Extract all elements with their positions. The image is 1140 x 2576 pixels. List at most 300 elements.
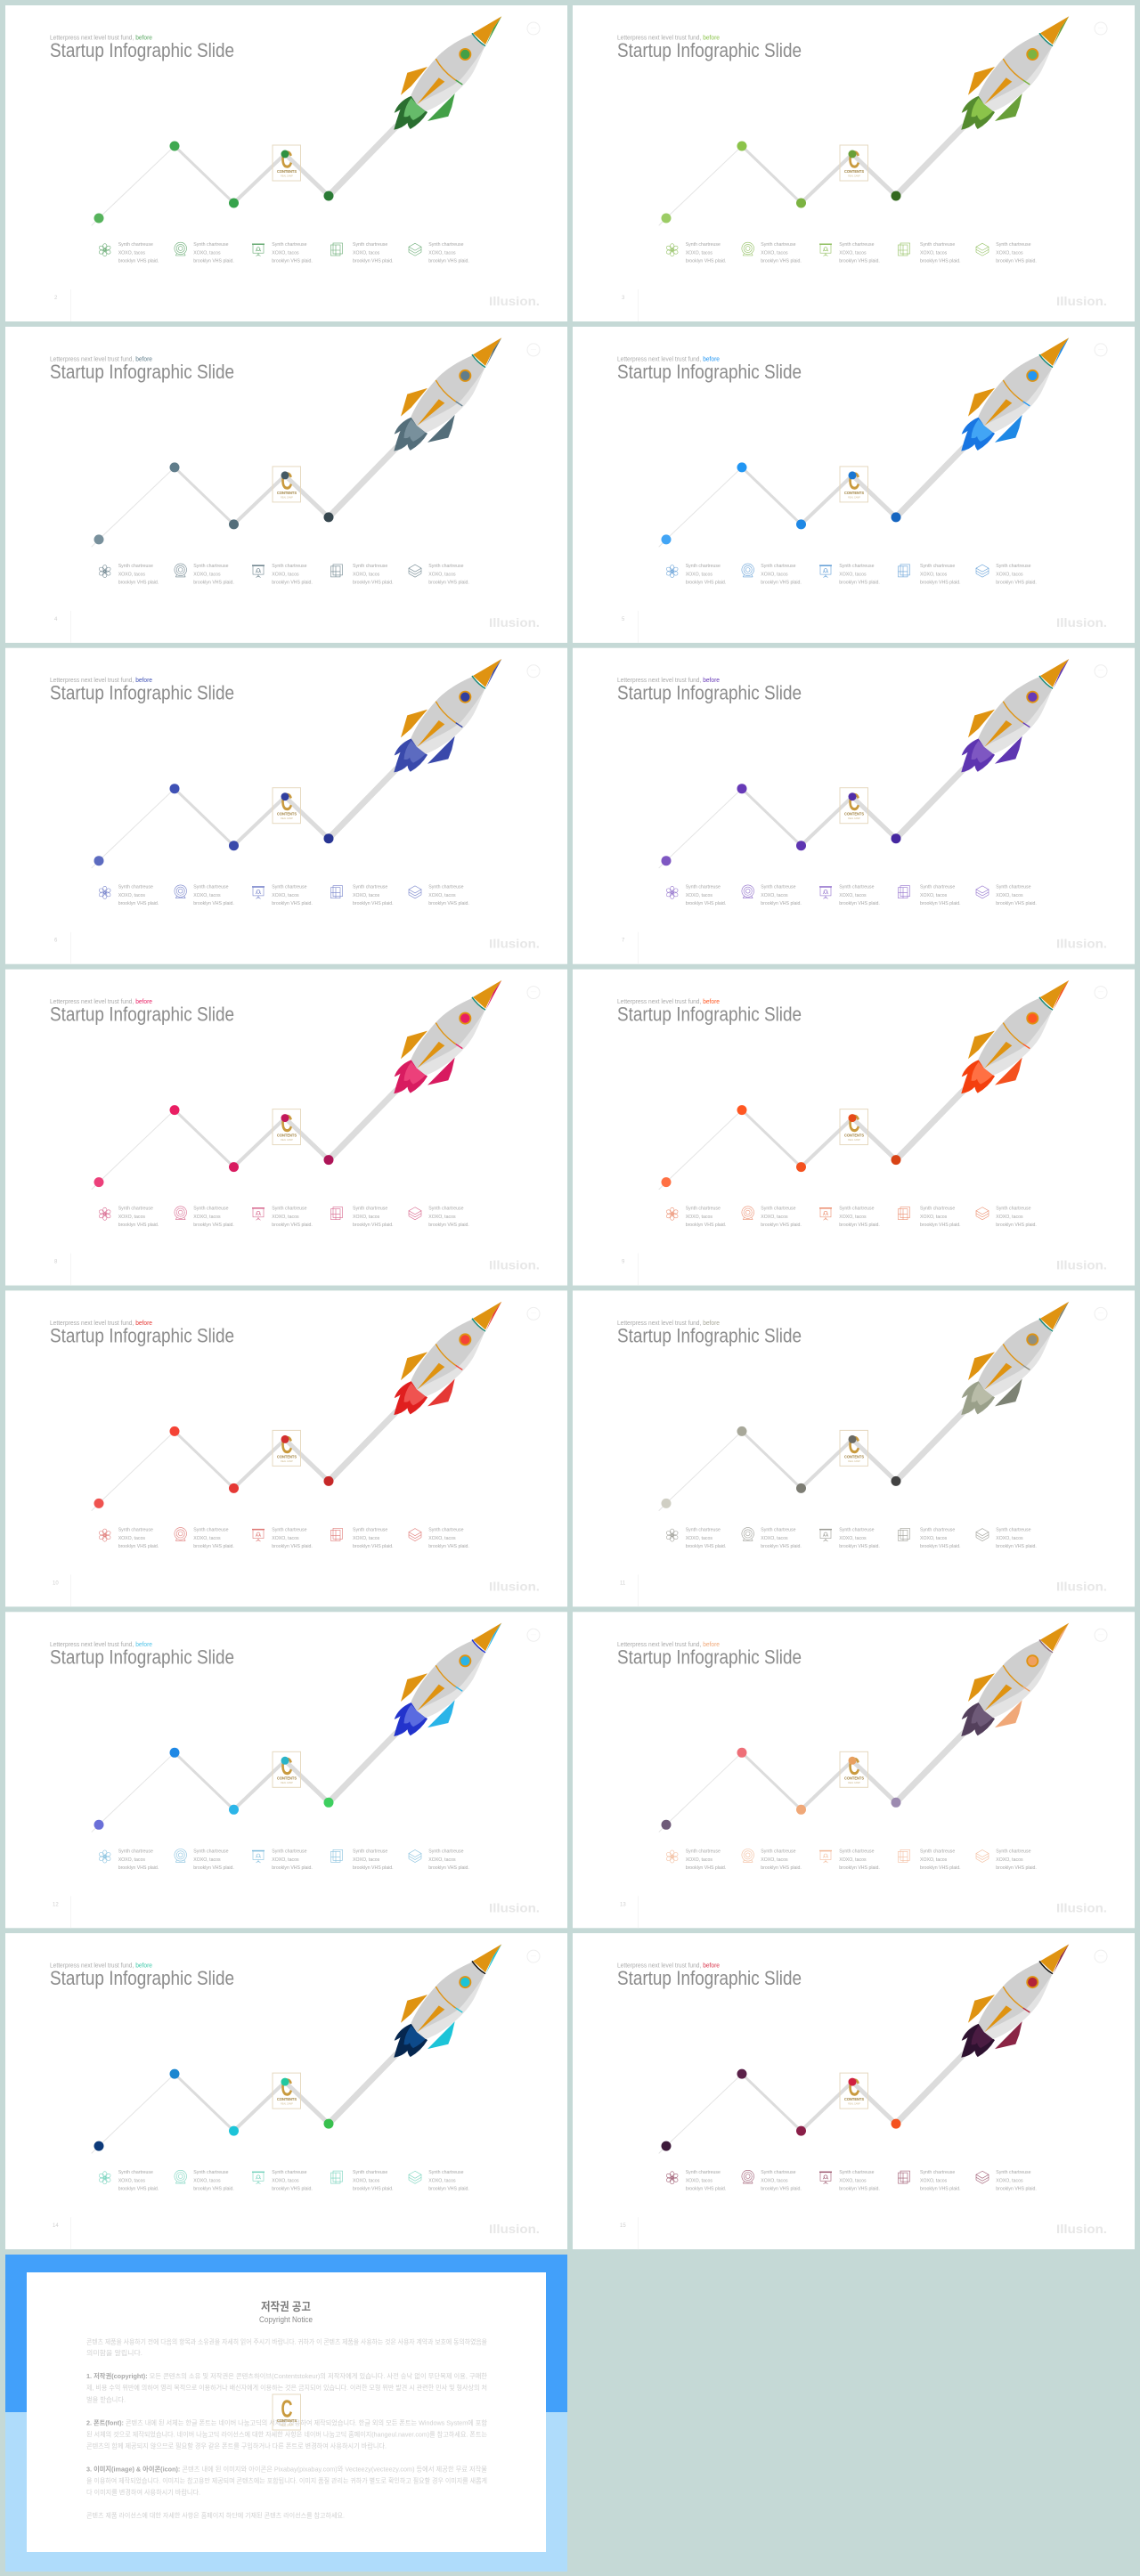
menu icon: ···: [1098, 1632, 1103, 1637]
feature list: XOXO, tacos: [193, 2179, 221, 2184]
footer: 7: [622, 939, 625, 944]
feature list: brooklyn VHS plaid.: [996, 1865, 1037, 1871]
feature list: brooklyn VHS plaid.: [118, 2187, 159, 2192]
feature list: XOXO, tacos: [839, 1536, 867, 1541]
footer: 3: [622, 296, 625, 301]
feature list: Synth chartreuse: [353, 242, 387, 248]
feature list: brooklyn VHS plaid.: [272, 580, 313, 585]
feature list: brooklyn VHS plaid.: [996, 901, 1037, 906]
feature list: Synth chartreuse: [353, 885, 387, 890]
feature list: Synth chartreuse: [839, 1849, 875, 1854]
feature list: XOXO, tacos: [839, 1857, 867, 1863]
feature list: Synth chartreuse: [686, 1207, 721, 1212]
footer: 5: [622, 617, 625, 622]
feature list: Synth chartreuse: [996, 1527, 1031, 1532]
heading: Letterpress next level trust fund, before: [617, 1321, 720, 1327]
panel: slide 7: [573, 648, 1135, 964]
feature list: brooklyn VHS plaid.: [193, 1223, 234, 1228]
heading: Startup Infographic Slide: [50, 1324, 234, 1346]
feature list: Synth chartreuse: [272, 564, 307, 569]
feature list: [665, 1207, 1037, 1228]
rocket: [961, 1302, 1069, 1415]
feature list: Synth chartreuse: [761, 1849, 796, 1854]
feature list: Synth chartreuse: [428, 885, 464, 890]
footer: Illusion.: [1056, 2222, 1107, 2236]
rocket: [394, 980, 501, 1093]
feature list: XOXO, tacos: [118, 2179, 145, 2184]
feature list: Synth chartreuse: [353, 564, 387, 569]
heading: Letterpress next level trust fund, before: [50, 1642, 152, 1648]
line chart: [659, 769, 964, 868]
feature list: [98, 1527, 469, 1549]
menu icon: [1095, 987, 1107, 999]
footer: [622, 1254, 1107, 1286]
feature list: XOXO, tacos: [353, 251, 380, 256]
heading: Letterpress next level trust fund, before: [50, 356, 152, 362]
feature list: XOXO, tacos: [118, 251, 145, 256]
footer: Illusion.: [1056, 294, 1107, 308]
menu icon: ···: [531, 669, 536, 674]
feature list: Synth chartreuse: [839, 885, 875, 890]
footer: Illusion.: [489, 1900, 540, 1914]
feature list: XOXO, tacos: [428, 251, 456, 256]
panel: slide 2: [5, 5, 567, 321]
footer: [54, 289, 540, 321]
feature list: brooklyn VHS plaid.: [920, 2187, 961, 2192]
feature list: XOXO, tacos: [353, 893, 380, 898]
feature list: XOXO, tacos: [118, 893, 145, 898]
footer: [53, 2217, 540, 2249]
footer: Illusion.: [1056, 1258, 1107, 1272]
feature list: brooklyn VHS plaid.: [920, 901, 961, 906]
panel: copyright notice: [5, 2255, 567, 2572]
footer: Illusion.: [489, 937, 540, 951]
feature list: Synth chartreuse: [428, 242, 464, 248]
feature list: Synth chartreuse: [686, 1527, 721, 1532]
feature list: brooklyn VHS plaid.: [118, 1544, 159, 1549]
feature list: XOXO, tacos: [686, 893, 712, 898]
line chart: [659, 2054, 964, 2153]
feature list: [665, 564, 1037, 585]
feature list: Synth chartreuse: [193, 1527, 229, 1532]
heading: Startup Infographic Slide: [617, 1004, 802, 1026]
feature list: XOXO, tacos: [428, 1215, 456, 1220]
line chart: [659, 1411, 964, 1510]
panel: slide 13: [573, 1612, 1135, 1928]
copyright body text: 3. 이미지(image) & 아이콘(icon): 콘텐츠 내에 된 이미지와 아이콘은 Pixabay(pixabay.com)와 Vecteezy(vecteezy.com) 등에서 제공한 무료 저작물: [86, 2465, 487, 2474]
feature list: brooklyn VHS plaid.: [272, 258, 313, 264]
line chart: [92, 2054, 396, 2153]
feature list: brooklyn VHS plaid.: [761, 580, 802, 585]
footer: [622, 289, 1107, 321]
feature list: XOXO, tacos: [686, 1857, 712, 1863]
feature list: Synth chartreuse: [920, 242, 955, 248]
feature list: [98, 2170, 469, 2192]
panel: slide 8: [5, 970, 567, 1286]
feature list: [665, 1527, 1037, 1549]
feature list: Synth chartreuse: [193, 564, 229, 569]
feature list: XOXO, tacos: [272, 2179, 299, 2184]
feature list: XOXO, tacos: [761, 572, 788, 577]
feature list: Synth chartreuse: [839, 1527, 875, 1532]
heading: Startup Infographic Slide: [617, 1324, 802, 1346]
feature list: [665, 2170, 1037, 2192]
feature list: brooklyn VHS plaid.: [353, 2187, 394, 2192]
feature list: brooklyn VHS plaid.: [686, 258, 726, 264]
feature list: Synth chartreuse: [118, 1849, 153, 1854]
feature list: [98, 1207, 469, 1228]
feature list: Synth chartreuse: [428, 1849, 464, 1854]
line chart: [659, 1733, 964, 1832]
feature list: brooklyn VHS plaid.: [839, 1865, 880, 1871]
menu icon: ···: [1098, 1954, 1103, 1959]
feature list: XOXO, tacos: [761, 251, 788, 256]
rocket: [394, 1623, 501, 1736]
feature list: brooklyn VHS plaid.: [353, 1865, 394, 1871]
line chart: [659, 1091, 964, 1190]
feature list: XOXO, tacos: [428, 572, 456, 577]
menu icon: ···: [1098, 990, 1103, 995]
feature list: Synth chartreuse: [428, 564, 464, 569]
feature list: brooklyn VHS plaid.: [761, 1865, 802, 1871]
feature list: XOXO, tacos: [686, 2179, 712, 2184]
feature list: brooklyn VHS plaid.: [686, 1865, 726, 1871]
feature list: XOXO, tacos: [920, 572, 948, 577]
line chart: [92, 1733, 396, 1832]
feature list: brooklyn VHS plaid.: [353, 258, 394, 264]
menu icon: [1095, 665, 1107, 678]
feature list: XOXO, tacos: [272, 893, 299, 898]
feature list: XOXO, tacos: [353, 1536, 380, 1541]
feature list: brooklyn VHS plaid.: [118, 1865, 159, 1871]
heading: Letterpress next level trust fund, before: [50, 999, 152, 1005]
feature list: XOXO, tacos: [839, 572, 867, 577]
feature list: XOXO, tacos: [920, 251, 948, 256]
footer: 8: [54, 1260, 58, 1265]
footer: Illusion.: [1056, 937, 1107, 951]
menu icon: ···: [531, 1632, 536, 1637]
copyright body text: 의미함을 알립니다.: [86, 2348, 142, 2357]
feature list: [98, 1849, 469, 1871]
footer: 14: [53, 2223, 59, 2229]
feature list: XOXO, tacos: [118, 572, 145, 577]
feature list: XOXO, tacos: [920, 1536, 948, 1541]
feature list: Synth chartreuse: [272, 885, 307, 890]
line chart: [659, 448, 964, 547]
feature list: Synth chartreuse: [761, 2170, 796, 2175]
feature list: XOXO, tacos: [996, 1536, 1023, 1541]
footer: Illusion.: [1056, 615, 1107, 630]
menu icon: ···: [531, 1954, 536, 1959]
feature list: brooklyn VHS plaid.: [761, 1223, 802, 1228]
feature list: XOXO, tacos: [686, 251, 712, 256]
feature list: Synth chartreuse: [193, 885, 229, 890]
feature list: XOXO, tacos: [920, 2179, 948, 2184]
feature list: XOXO, tacos: [353, 572, 380, 577]
heading: Letterpress next level trust fund, before: [50, 678, 152, 684]
line chart: [92, 126, 396, 225]
feature list: Synth chartreuse: [353, 1849, 387, 1854]
feature list: XOXO, tacos: [193, 251, 221, 256]
feature list: Synth chartreuse: [996, 1849, 1031, 1854]
panel: slide 4: [5, 327, 567, 643]
heading: Startup Infographic Slide: [617, 361, 802, 383]
feature list: brooklyn VHS plaid.: [118, 580, 159, 585]
feature list: XOXO, tacos: [193, 572, 221, 577]
feature list: XOXO, tacos: [353, 1857, 380, 1863]
menu icon: [527, 1307, 540, 1320]
feature list: brooklyn VHS plaid.: [920, 1223, 961, 1228]
feature list: [98, 242, 469, 264]
feature list: XOXO, tacos: [272, 1215, 299, 1220]
copyright title: 저작권 공고: [261, 2300, 311, 2313]
feature list: brooklyn VHS plaid.: [272, 901, 313, 906]
feature list: XOXO, tacos: [193, 1215, 221, 1220]
footer: [54, 611, 540, 643]
copyright body text: 다 이미지를 변경하여 사용하시기 바랍니다.: [86, 2488, 200, 2497]
feature list: Synth chartreuse: [118, 1527, 153, 1532]
feature list: XOXO, tacos: [761, 1536, 788, 1541]
feature list: Synth chartreuse: [920, 1207, 955, 1212]
feature list: brooklyn VHS plaid.: [272, 1223, 313, 1228]
footer: 13: [620, 1902, 626, 1907]
feature list: Synth chartreuse: [272, 242, 307, 248]
panel: slide 14: [5, 1933, 567, 2249]
feature list: Synth chartreuse: [996, 564, 1031, 569]
feature list: XOXO, tacos: [118, 1857, 145, 1863]
copyright body text: 콘텐츠 제품 라이선스에 대한 자세한 사항은 홈페이지 하단에 기재된 콘텐츠 라이선스를 참고하세요.: [86, 2511, 345, 2520]
panel: slide 15: [573, 1933, 1135, 2249]
heading: Startup Infographic Slide: [50, 39, 234, 61]
feature list: Synth chartreuse: [686, 885, 721, 890]
heading: Startup Infographic Slide: [50, 1004, 234, 1026]
footer: Illusion.: [1056, 1579, 1107, 1593]
feature list: brooklyn VHS plaid.: [118, 258, 159, 264]
feature list: brooklyn VHS plaid.: [839, 901, 880, 906]
feature list: brooklyn VHS plaid.: [996, 580, 1037, 585]
rocket: [961, 16, 1069, 130]
feature list: brooklyn VHS plaid.: [272, 1544, 313, 1549]
feature list: Synth chartreuse: [272, 1849, 307, 1854]
feature list: brooklyn VHS plaid.: [920, 580, 961, 585]
feature list: brooklyn VHS plaid.: [761, 1544, 802, 1549]
footer: 4: [54, 617, 58, 622]
footer: 9: [622, 1260, 625, 1265]
footer: [53, 1574, 540, 1606]
feature list: [665, 242, 1037, 264]
feature list: brooklyn VHS plaid.: [996, 1544, 1037, 1549]
feature list: Synth chartreuse: [353, 1527, 387, 1532]
feature list: Synth chartreuse: [996, 2170, 1031, 2175]
feature list: brooklyn VHS plaid.: [353, 1223, 394, 1228]
feature list: Synth chartreuse: [118, 2170, 153, 2175]
heading: Letterpress next level trust fund, before: [50, 36, 152, 41]
feature list: XOXO, tacos: [761, 893, 788, 898]
copyright body text: 된 서체의 것으로 제작되었습니다. 네이버 나눔고딕 라이선스에 대한 자세한 사항은 네이버 나눔고딕 홈페이지(hangeul.naver.com)를 참고하세요. 폰트는: [86, 2429, 487, 2438]
heading: Letterpress next level trust fund, before: [50, 1321, 152, 1327]
feature list: Synth chartreuse: [686, 564, 721, 569]
feature list: [98, 564, 469, 585]
feature list: Synth chartreuse: [193, 1207, 229, 1212]
feature list: XOXO, tacos: [839, 893, 867, 898]
feature list: brooklyn VHS plaid.: [272, 2187, 313, 2192]
menu icon: ···: [1098, 347, 1103, 353]
feature list: Synth chartreuse: [272, 1527, 307, 1532]
feature list: Synth chartreuse: [761, 885, 796, 890]
feature list: XOXO, tacos: [996, 2179, 1023, 2184]
feature list: brooklyn VHS plaid.: [428, 1223, 469, 1228]
feature list: brooklyn VHS plaid.: [761, 258, 802, 264]
copyright body text: 1. 저작권(copyright): 모든 콘텐츠의 소유 및 저작권은 콘텐츠하이브(Contentstokeur)의 저작자에게 있습니다. 사전 승낙 없이 무단복제 이용, 구매한: [86, 2371, 487, 2380]
menu icon: ···: [1098, 26, 1103, 31]
panel: slide 12: [5, 1612, 567, 1928]
footer: 6: [54, 939, 58, 944]
feature list: XOXO, tacos: [996, 1215, 1023, 1220]
footer: Illusion.: [489, 294, 540, 308]
feature list: Synth chartreuse: [920, 564, 955, 569]
heading: Startup Infographic Slide: [50, 682, 234, 704]
feature list: brooklyn VHS plaid.: [996, 258, 1037, 264]
heading: Startup Infographic Slide: [617, 682, 802, 704]
feature list: XOXO, tacos: [996, 251, 1023, 256]
heading: Startup Infographic Slide: [50, 361, 234, 383]
feature list: Synth chartreuse: [839, 1207, 875, 1212]
feature list: [98, 885, 469, 906]
panel: slide 6: [5, 648, 567, 964]
feature list: brooklyn VHS plaid.: [428, 901, 469, 906]
feature list: brooklyn VHS plaid.: [193, 1865, 234, 1871]
feature list: Synth chartreuse: [428, 1527, 464, 1532]
feature list: brooklyn VHS plaid.: [761, 2187, 802, 2192]
footer: [54, 932, 540, 964]
feature list: brooklyn VHS plaid.: [272, 1865, 313, 1871]
footer: Illusion.: [489, 2222, 540, 2236]
heading: Startup Infographic Slide: [50, 1646, 234, 1668]
feature list: brooklyn VHS plaid.: [118, 901, 159, 906]
feature list: Synth chartreuse: [272, 2170, 307, 2175]
footer: Illusion.: [489, 615, 540, 630]
feature list: XOXO, tacos: [839, 251, 867, 256]
heading: Letterpress next level trust fund, before: [617, 1642, 720, 1648]
copyright body text: 콘텐츠 제품을 사용하기 전에 다음의 항목과 소유권을 자세히 읽어 주시기 바랍니다. 귀하가 이 콘텐츠 제품을 사용하는 것은 사용자 계약과 보호에 동의하였음을: [86, 2336, 487, 2345]
rocket: [961, 980, 1069, 1093]
feature list: brooklyn VHS plaid.: [428, 1544, 469, 1549]
feature list: XOXO, tacos: [272, 251, 299, 256]
watermark logo: [273, 2394, 301, 2430]
footer: [53, 1896, 540, 1928]
panel: slide 11: [573, 1290, 1135, 1606]
feature list: XOXO, tacos: [839, 1215, 867, 1220]
feature list: Synth chartreuse: [353, 2170, 387, 2175]
feature list: Synth chartreuse: [686, 1849, 721, 1854]
feature list: brooklyn VHS plaid.: [193, 1544, 234, 1549]
menu icon: [527, 344, 540, 356]
feature list: XOXO, tacos: [761, 2179, 788, 2184]
line chart: [92, 1091, 396, 1190]
feature list: Synth chartreuse: [118, 242, 153, 248]
heading: Letterpress next level trust fund, before: [617, 678, 720, 684]
footer: [620, 2217, 1107, 2249]
feature list: XOXO, tacos: [428, 1536, 456, 1541]
footer: [620, 1574, 1107, 1606]
feature list: XOXO, tacos: [686, 572, 712, 577]
feature list: brooklyn VHS plaid.: [118, 1223, 159, 1228]
line chart: [92, 769, 396, 868]
feature list: Synth chartreuse: [686, 242, 721, 248]
feature list: Synth chartreuse: [920, 1527, 955, 1532]
heading: Letterpress next level trust fund, before: [617, 356, 720, 362]
heading: Startup Infographic Slide: [617, 1646, 802, 1668]
feature list: brooklyn VHS plaid.: [686, 901, 726, 906]
panel: slide 5: [573, 327, 1135, 643]
feature list: brooklyn VHS plaid.: [686, 1544, 726, 1549]
feature list: brooklyn VHS plaid.: [353, 580, 394, 585]
feature list: XOXO, tacos: [118, 1536, 145, 1541]
copyright body text: 을 이용하여 제작되었습니다. 이미지는 참고용만 제공되며 콘텐츠에는 포함됩니다. 이미지 품질 관리는 귀하가 별도로 확인하고 필요할 경우 이미지를 새롭게: [86, 2475, 487, 2484]
feature list: brooklyn VHS plaid.: [839, 1544, 880, 1549]
feature list: XOXO, tacos: [839, 2179, 867, 2184]
line chart: [92, 1411, 396, 1510]
copyright body text: 2. 폰트(font): 콘텐츠 내에 된 서체는 한글 폰트는 네이버 나눔고딕의 서체를 사용하여 제작되었습니다. 한글 외의 모든 폰트는 Windows System에 포함: [86, 2418, 487, 2427]
feature list: XOXO, tacos: [996, 893, 1023, 898]
feature list: XOXO, tacos: [353, 2179, 380, 2184]
footer: 11: [620, 1581, 626, 1586]
feature list: XOXO, tacos: [761, 1215, 788, 1220]
feature list: brooklyn VHS plaid.: [193, 2187, 234, 2192]
feature list: brooklyn VHS plaid.: [353, 901, 394, 906]
feature list: brooklyn VHS plaid.: [193, 901, 234, 906]
menu icon: [527, 22, 540, 35]
feature list: XOXO, tacos: [428, 893, 456, 898]
feature list: brooklyn VHS plaid.: [193, 258, 234, 264]
menu icon: ···: [1098, 1311, 1103, 1316]
line chart: [659, 126, 964, 225]
feature list: Synth chartreuse: [353, 1207, 387, 1212]
feature list: Synth chartreuse: [920, 885, 955, 890]
heading: Letterpress next level trust fund, before: [617, 999, 720, 1005]
feature list: brooklyn VHS plaid.: [761, 901, 802, 906]
copyright body text: 제, 비용 수익 위반에 의하여 영리 목적으로 이용하거나 배신자에게 이용하는 것은 금지되어 있습니다. 이러한 모형 위반 발견 시 관련한 민사 및 형사상의 처: [86, 2383, 487, 2392]
feature list: XOXO, tacos: [272, 572, 299, 577]
footer: Illusion.: [489, 1579, 540, 1593]
feature list: XOXO, tacos: [920, 1215, 948, 1220]
feature list: brooklyn VHS plaid.: [428, 2187, 469, 2192]
heading: Letterpress next level trust fund, before: [617, 36, 720, 41]
panel: slide 3: [573, 5, 1135, 321]
feature list: Synth chartreuse: [428, 1207, 464, 1212]
feature list: brooklyn VHS plaid.: [428, 1865, 469, 1871]
feature list: Synth chartreuse: [193, 1849, 229, 1854]
feature list: XOXO, tacos: [761, 1857, 788, 1863]
menu icon: [1095, 1950, 1107, 1962]
footer: 2: [54, 296, 58, 301]
feature list: brooklyn VHS plaid.: [920, 258, 961, 264]
feature list: Synth chartreuse: [428, 2170, 464, 2175]
feature list: Synth chartreuse: [761, 564, 796, 569]
menu icon: [527, 665, 540, 678]
menu icon: [1095, 1629, 1107, 1641]
footer: [622, 611, 1107, 643]
footer: 10: [53, 1581, 59, 1586]
menu icon: [1095, 22, 1107, 35]
feature list: XOXO, tacos: [353, 1215, 380, 1220]
footer: [620, 1896, 1107, 1928]
feature list: brooklyn VHS plaid.: [839, 580, 880, 585]
menu icon: ···: [531, 1311, 536, 1316]
feature list: Synth chartreuse: [118, 1207, 153, 1212]
rocket: [394, 1302, 501, 1415]
feature list: brooklyn VHS plaid.: [686, 580, 726, 585]
